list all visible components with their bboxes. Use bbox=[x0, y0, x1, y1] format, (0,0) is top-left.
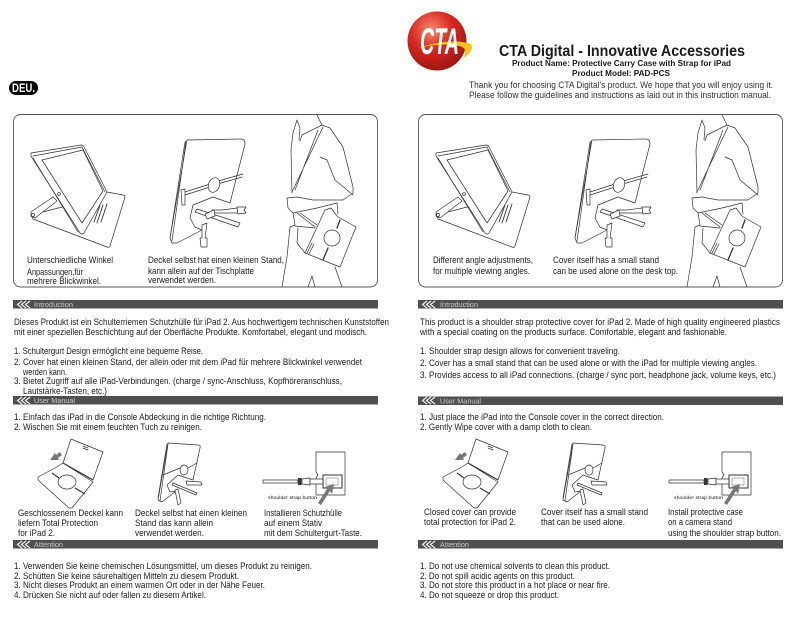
caption: closed cover bbox=[424, 507, 516, 527]
text block: German attention bbox=[14, 561, 312, 600]
title: CTA Digital - Innovative Accessories bbox=[499, 43, 745, 60]
section bar: Introduction (English) bbox=[418, 300, 783, 309]
text block: English attention bbox=[420, 561, 610, 600]
caption: stand: Cover itself has a small stand bbox=[553, 255, 659, 265]
caption: viewing angles bbox=[27, 255, 113, 286]
section bar: Attention (English): Attention bbox=[440, 540, 469, 549]
thank you note: Thank you for choosing CTA Digital's product. We hope that you will enjoy using it. bbox=[469, 80, 773, 90]
caption: closed cover: Geschlossenem Deckel kann bbox=[18, 508, 123, 518]
illustration: cover with stand bbox=[170, 139, 246, 247]
text block: English attention: 2. Do not spill acidic agents on this product. bbox=[420, 571, 575, 581]
language badge: DEU: DEU. bbox=[12, 83, 35, 95]
text block: English introduction bbox=[419, 317, 781, 380]
section bar: Introduction (German): Introduction bbox=[34, 300, 73, 309]
caption: small stand bbox=[135, 508, 247, 538]
caption: small stand bbox=[541, 507, 648, 527]
caption: stand bbox=[553, 255, 678, 276]
caption: camera stand: Install protective case bbox=[668, 507, 743, 517]
text block: English attention: 3. Do not store this product in a hot place or near fire. bbox=[420, 580, 610, 590]
caption: small stand: Cover itself has a small stand bbox=[541, 507, 648, 517]
section bar: Attention (German): Attention bbox=[34, 540, 63, 549]
CTA logo: CTA bbox=[420, 21, 459, 62]
caption: camera stand: using the shoulder strap button. bbox=[668, 528, 781, 538]
text block: English introduction: 1. Shoulder strap design allows for convenient traveling. bbox=[420, 346, 620, 356]
caption: closed cover bbox=[18, 508, 123, 538]
product model: Product Model: PAD-PCS bbox=[572, 68, 670, 78]
caption: viewing angles: Different angle adjustments, bbox=[433, 255, 533, 265]
text block: German introduction: werden kann. bbox=[22, 367, 67, 377]
illustration: closed cover bbox=[443, 439, 508, 508]
section bar: Attention (English) bbox=[418, 540, 783, 549]
caption: stand: can be used alone on the desk top. bbox=[553, 266, 678, 276]
illustration: small stand bbox=[563, 443, 607, 505]
illustration: shoulder strap button bbox=[669, 452, 751, 505]
illustration: tablet at angle bbox=[31, 145, 125, 247]
caption: viewing angles: mehrere Blickwinkel. bbox=[27, 276, 101, 286]
caption: stand: Deckel selbst hat einen kleinen Stand, bbox=[148, 255, 284, 265]
caption: small stand: verwendet werden. bbox=[135, 528, 204, 538]
caption: stand: verwendet werden. bbox=[148, 275, 216, 285]
text block: English attention: 4. Do not squeeze or drop this product. bbox=[420, 590, 559, 600]
caption: small stand: Stand das kann allein bbox=[135, 518, 213, 528]
text block: English attention: 1. Do not use chemical solvents to clean this product. bbox=[420, 561, 610, 571]
caption: closed cover: Closed cover can provide bbox=[424, 507, 516, 517]
text block: German attention: 2. Schütten Sie keine säurehaltigen Mitteln zu diesem Produkt. bbox=[14, 571, 239, 581]
text block: German introduction: 1. Schultergurt Design ermöglicht eine bequeme Reise. bbox=[14, 346, 203, 356]
illustration: cover with stand bbox=[575, 139, 651, 247]
text block: English introduction: This product is a shoulder strap protective cover for iPad 2. Made of high quality engineered plastics bbox=[420, 317, 781, 327]
text block: German introduction: 3. Bietet Zugriff auf alle iPad-Verbindungen. (charge / sync-Anschluss, Kopfhöreranschluss, bbox=[14, 376, 342, 386]
caption: viewing angles bbox=[433, 255, 533, 276]
panel: English illustrations bbox=[418, 114, 782, 287]
section bar: Introduction (German) bbox=[13, 300, 378, 309]
caption: closed cover: for iPad 2. bbox=[18, 528, 55, 538]
caption: stand: kann allein auf der Tischplatte bbox=[148, 266, 254, 276]
illustration: person with shoulder strap bbox=[687, 115, 761, 287]
thank you note bbox=[469, 80, 773, 100]
section bar: User Manual (German) bbox=[13, 396, 378, 405]
caption: stand bbox=[148, 255, 284, 285]
text block: German user manual: 1. Einfach das iPad in die Console Abdeckung in die richtige Richtung. bbox=[14, 412, 266, 422]
text block: German user manual bbox=[14, 412, 266, 432]
illustration: tablet at angle bbox=[436, 145, 530, 247]
caption: viewing angles: for multiple viewing angles. bbox=[433, 266, 530, 276]
section bar: User Manual (English): User Manual bbox=[440, 396, 481, 406]
text block: German attention: 1. Verwenden Sie keine chemischen Lösungsmittel, um dieses Produkt zu reinigen. bbox=[14, 561, 312, 571]
illustration: shoulder strap button bbox=[263, 452, 345, 505]
text block: English user manual bbox=[420, 412, 664, 432]
caption: camera stand: Installieren Schutzhülle bbox=[264, 508, 342, 518]
header text bbox=[469, 43, 773, 100]
illustration: closed cover bbox=[38, 439, 103, 508]
text block: German user manual: 2. Wischen Sie mit einem feuchten Tuch zu reinigen. bbox=[14, 422, 202, 432]
text block: German attention: 4. Drücken Sie nicht auf oder fallen zu diesem Artikel. bbox=[14, 590, 206, 600]
text block: German introduction: 2. Cover hat einen kleinen Stand, der allein oder mit dem iPad für mehrere Blickwinkel verwendet bbox=[14, 357, 362, 367]
caption: small stand: that can be used alone. bbox=[541, 517, 625, 527]
text block: English introduction: with a special coating on the products surface. Comfortable, elegant and fashionable. bbox=[419, 327, 727, 337]
text block: English introduction: 2. Cover has a small stand that can be used alone or with the iPad for multiple viewing angles. bbox=[420, 358, 757, 368]
text block: German introduction bbox=[14, 317, 389, 396]
caption: camera stand: auf einem Stativ bbox=[264, 518, 323, 528]
section bar: User Manual (German): User Manual bbox=[34, 396, 75, 405]
text block: English user manual: 2. Gently Wipe cover with a damp cloth to clean. bbox=[420, 422, 592, 432]
caption: camera stand bbox=[264, 508, 362, 538]
thank you note: Please follow the guidelines and instructions as laid out in this instruction manual. bbox=[469, 90, 771, 100]
caption: camera stand: mit dem Schultergurt-Taste. bbox=[264, 528, 362, 538]
caption: viewing angles: Unterschiedliche Winkel bbox=[27, 255, 113, 265]
caption: closed cover: total protection for iPad 2. bbox=[424, 517, 516, 527]
illustration: person with shoulder strap bbox=[282, 115, 356, 287]
text block: German introduction: mit einer speziellen Beschichtung auf der Oberfläche Produkte. Komfortabel, elegant und modisch. bbox=[14, 327, 367, 337]
section bar: User Manual (English) bbox=[418, 396, 783, 406]
panel: German illustrations bbox=[14, 114, 378, 287]
text block: German attention: 3. Nicht dieses Produkt an einem warmen Ort oder in der Nähe Feuer. bbox=[14, 580, 265, 590]
CTA logo bbox=[408, 12, 472, 70]
text block: English introduction: 3. Provides access to all iPad connections. (charge / sync port, headphone jack, volume keys, etc.) bbox=[420, 370, 776, 380]
illustration: small stand bbox=[158, 443, 202, 505]
product name: Product Name: Protective Carry Case with Strap for iPad bbox=[512, 58, 731, 68]
caption: closed cover: liefern Total Protection bbox=[18, 518, 98, 528]
text block: German introduction: Dieses Produkt ist ein Schulterriemen Schutzhülle für iPad 2. Aus hochwertigem technischen Kunststoffen bbox=[14, 317, 389, 327]
text block: English user manual: 1. Just place the iPad into the Console cover in the correct direction. bbox=[420, 412, 664, 422]
caption: camera stand bbox=[668, 507, 781, 538]
caption: camera stand: on a camera stand bbox=[668, 517, 732, 527]
section bar: Attention (German) bbox=[13, 540, 378, 549]
caption: small stand: Deckel selbst hat einen kleinen bbox=[135, 508, 247, 518]
section bar: Introduction (English): Introduction bbox=[440, 300, 478, 309]
text block: German introduction: Lautstärke-Tasten, etc.) bbox=[23, 386, 107, 396]
caption: viewing angles: Anpassungen,für bbox=[27, 267, 83, 277]
